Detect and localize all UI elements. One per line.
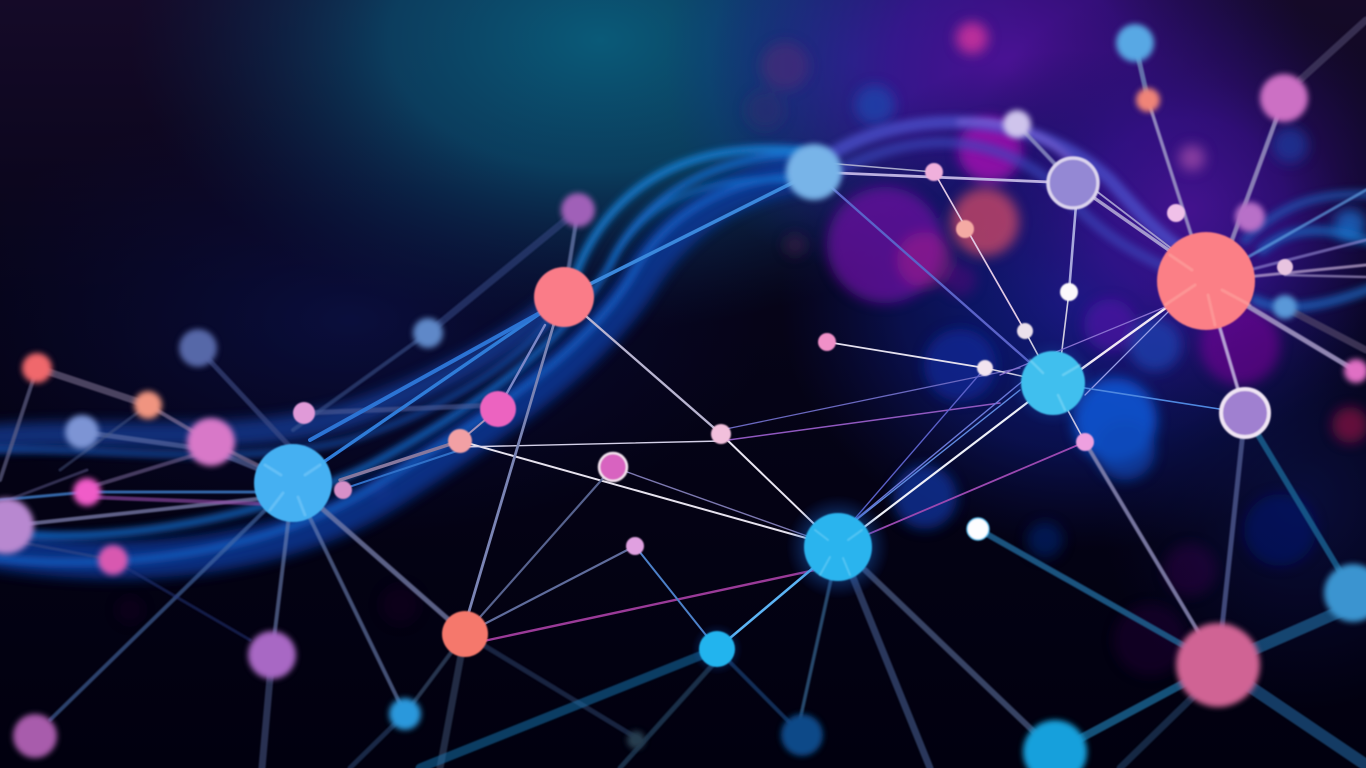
sharp connections: [293, 162, 1245, 649]
node: left pink: [187, 418, 235, 466]
node: blue hub left: [254, 444, 332, 522]
node: top right orange: [1136, 88, 1160, 112]
node: small pink by hub: [334, 481, 352, 499]
node: ringed pink center: [599, 453, 627, 481]
node: peach small: [956, 220, 974, 238]
node: large coral hub: [1157, 232, 1255, 330]
node: coral upper center: [534, 267, 594, 327]
node: bottom blue: [1023, 720, 1087, 768]
node: pink near hub: [480, 391, 516, 427]
node: right edge blue: [1324, 564, 1366, 622]
node: pale center: [711, 424, 731, 444]
node: pink small upper: [925, 163, 943, 181]
node: small pale blue: [1273, 295, 1297, 319]
glow behind hubs: [691, 339, 1097, 675]
node: lower dark blue: [781, 714, 823, 756]
flowing blue ribbons: [0, 121, 1366, 562]
ribbon: upper left band: [0, 295, 565, 440]
node: pale pink small: [1017, 323, 1033, 339]
node: top pale blue: [786, 144, 842, 200]
node: top right pink: [1260, 74, 1308, 122]
node: white with cyan glow: [967, 518, 989, 540]
node: faded blue: [413, 318, 443, 348]
ribbon strands: [0, 121, 1366, 562]
node: ringed lilac right: [1221, 389, 1269, 437]
node: small pale pink: [1235, 202, 1265, 232]
node: cyan hub center: [804, 513, 872, 581]
node: lower blue: [389, 698, 421, 730]
node: corner mauve: [13, 714, 57, 758]
node: cyan small: [699, 631, 735, 667]
sharp foreground nodes: [254, 158, 1293, 667]
node: left orange: [134, 391, 162, 419]
bokeh lights: [116, 22, 1366, 676]
node: right small pink: [1344, 359, 1366, 383]
node: top right blue: [1116, 24, 1154, 62]
node: pink left of cluster: [818, 333, 836, 351]
node: pink lower center: [626, 537, 644, 555]
node: cyan hub right: [1021, 351, 1085, 415]
node: faded periwinkle: [179, 329, 217, 367]
node: small pink left: [293, 402, 315, 424]
node: pink below cyan hub: [1076, 433, 1094, 451]
node: pink near coral hub: [1167, 204, 1185, 222]
node: lower purple: [248, 631, 296, 679]
node: lower left pink: [98, 545, 128, 575]
node: white small: [1060, 283, 1078, 301]
node: left pale blue: [65, 415, 99, 449]
node: faint dark: [627, 731, 645, 749]
node: pale pink center right: [977, 360, 993, 376]
ribbon: wide lower band: [0, 170, 815, 560]
node: lower right pink: [1176, 623, 1260, 707]
node: pale near coral hub: [1277, 259, 1293, 275]
node: peach: [448, 429, 472, 453]
node: edge lilac: [0, 498, 34, 554]
node: left coral: [22, 353, 52, 383]
node: top pale lilac: [1003, 110, 1031, 138]
hub spokes: [265, 255, 1250, 575]
node: coral lower center: [442, 611, 488, 657]
node: left hot pink: [73, 478, 101, 506]
node: ringed lilac top: [1048, 158, 1098, 208]
node: upper left mauve: [561, 193, 595, 227]
